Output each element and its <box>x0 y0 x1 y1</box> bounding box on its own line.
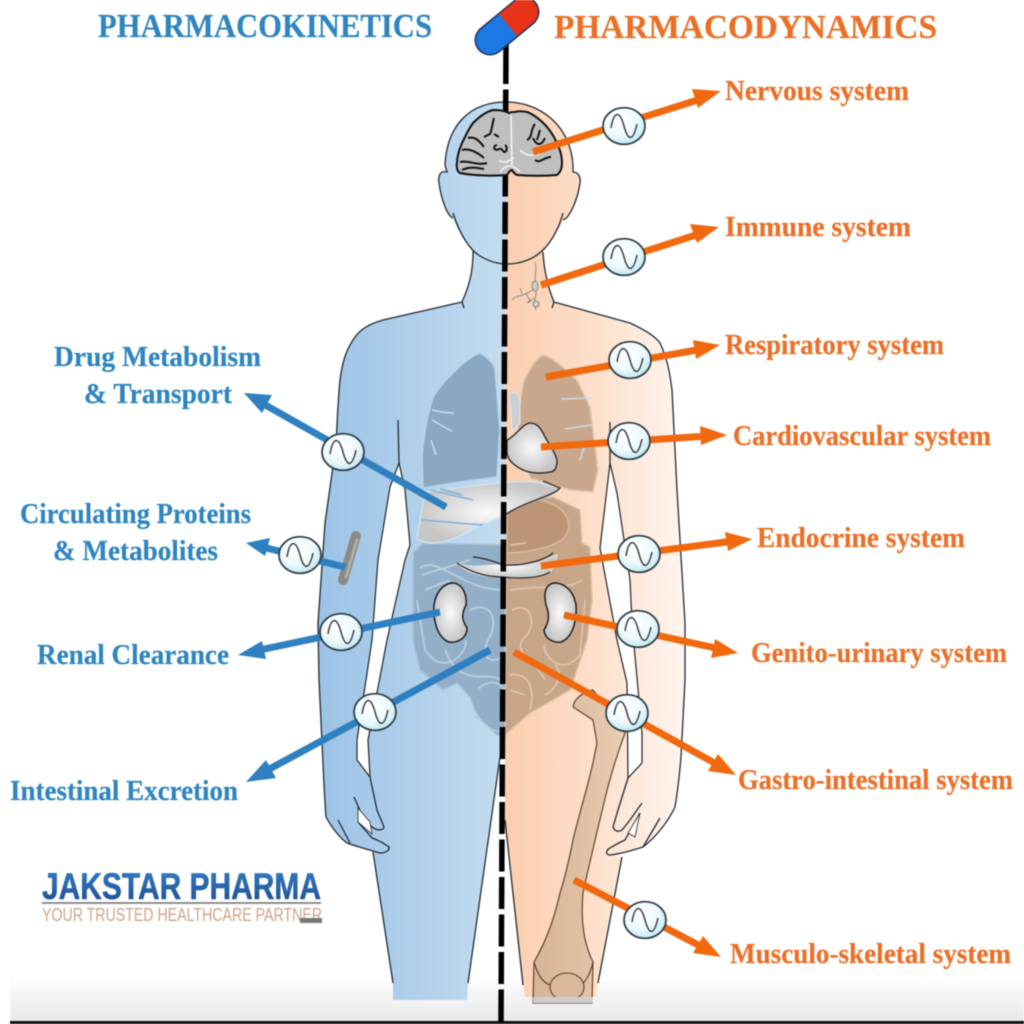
organ: brain <box>457 110 562 176</box>
outline of body <box>318 102 685 985</box>
arrows: pharmacokinetics (blue) <box>238 393 490 782</box>
organ: femur bone <box>533 690 625 1003</box>
label: intestinal excretion: Intestinal Excretion <box>10 775 238 807</box>
label: endocrine system: Endocrine system <box>757 522 965 554</box>
arrow: nervous system <box>533 89 721 152</box>
center dashed divider <box>501 45 506 1022</box>
oscillator badges <box>279 108 666 938</box>
label: immune system: Immune system <box>725 211 911 243</box>
arrow: cardiovascular system <box>541 426 727 447</box>
icon: lymph nodes <box>512 262 539 310</box>
label: circulating proteins and metabolites: & Metabolites <box>53 535 218 567</box>
label: respiratory system: Respiratory system <box>725 329 944 361</box>
body: pharmacodynamics half <box>505 102 685 997</box>
pill icon <box>490 12 524 40</box>
body: pharmacokinetics half <box>318 102 506 1000</box>
arrow: intestinal excretion <box>246 650 490 782</box>
organ: kidneys <box>434 583 576 642</box>
badge: immune <box>603 239 645 275</box>
organ: lungs <box>422 353 598 492</box>
organ: liver <box>417 481 560 543</box>
arrow: genito-urinary system <box>564 615 738 658</box>
arrow: respiratory system <box>546 340 720 377</box>
organ: pancreas <box>457 553 557 578</box>
label: drug metabolism and transport: & Transport <box>84 378 232 410</box>
label: musculo-skeletal system: Musculo-skeletal system <box>730 938 1011 970</box>
logo: jakstar pharma <box>42 866 322 925</box>
organ: trachea and heart <box>507 392 557 473</box>
arrows: pharmacodynamics (orange) <box>514 89 752 957</box>
badge: gastro-intestinal <box>606 695 648 731</box>
badge: drug metabolism <box>322 434 364 470</box>
badge: musculo-skeletal <box>624 902 666 938</box>
label: circulating proteins and metabolites: Circulating Proteins <box>20 498 251 530</box>
label: nervous system: Nervous system <box>725 75 909 107</box>
organ: intestines <box>413 497 592 735</box>
arrow: renal clearance <box>238 612 440 659</box>
arrow: immune system <box>541 224 719 285</box>
logo: jakstar pharma: JAKSTAR PHARMA <box>42 866 321 907</box>
finger gaps <box>358 808 640 837</box>
badge: circulating proteins <box>279 537 321 573</box>
arrow: circulating proteins <box>246 538 345 567</box>
arrow: gastro-intestinal system <box>514 652 736 775</box>
heading: pharmacodynamics: PHARMACODYNAMICS <box>554 9 937 46</box>
badge: intestinal excretion <box>354 694 396 730</box>
labels: pharmacokinetics processes <box>10 341 261 807</box>
arrow: musculo-skeletal system <box>574 880 721 957</box>
icon: blood sample tube <box>343 536 357 580</box>
gap: left arm to torso <box>357 463 410 777</box>
badge: endocrine <box>618 536 660 572</box>
label: circulating proteins and metabolites <box>20 498 251 567</box>
badge: renal clearance <box>320 614 362 650</box>
labels: pharmacodynamics systems <box>725 75 1013 970</box>
badge: cardiovascular <box>608 423 650 459</box>
body figure <box>318 102 685 1000</box>
heading: pharmacokinetics: PHARMACOKINETICS <box>98 8 432 45</box>
arrow: endocrine system <box>541 532 752 566</box>
badge: genito-urinary <box>617 611 659 647</box>
badge: respiratory <box>609 342 651 378</box>
gap: right arm to torso <box>600 463 642 778</box>
label: cardiovascular system: Cardiovascular system <box>733 420 991 452</box>
label: drug metabolism and transport: Drug Metabolism <box>54 341 261 373</box>
logo: jakstar pharma: YOUR TRUSTED HEALTHCARE PARTNER <box>42 905 322 925</box>
badge: nervous <box>603 108 645 144</box>
label: drug metabolism and transport <box>54 341 261 410</box>
label: genito-urinary system: Genito-urinary system <box>751 637 1007 669</box>
label: renal clearance: Renal Clearance <box>37 639 229 671</box>
arrow: drug metabolism <box>244 393 446 507</box>
page background floor <box>10 975 1024 1024</box>
